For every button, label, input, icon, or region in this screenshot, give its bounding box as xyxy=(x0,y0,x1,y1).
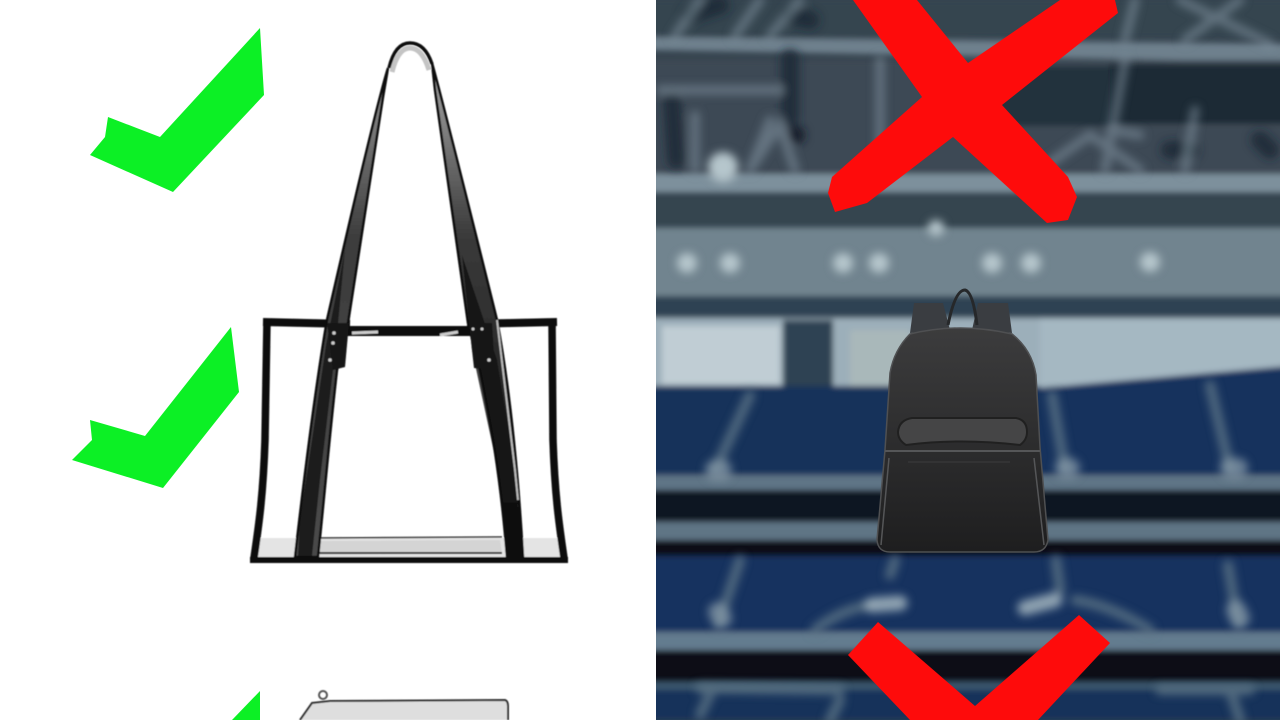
black backpack xyxy=(877,290,1048,552)
backpack handle xyxy=(948,290,977,325)
right strap xyxy=(432,63,523,557)
icon: red X top xyxy=(828,0,1118,223)
backpack straps xyxy=(910,303,1012,333)
stadium roof truss and seat frames xyxy=(660,0,1270,720)
panel: stadium background xyxy=(650,0,1280,720)
backpack zipper line xyxy=(885,450,1040,452)
panel: allowed bags on white background xyxy=(0,0,656,720)
handle arch xyxy=(389,43,432,68)
icon: green check mark top xyxy=(90,28,264,192)
bag body outline xyxy=(263,322,557,324)
left strap xyxy=(295,68,388,557)
icon: green check mark bottom xyxy=(232,691,260,720)
icon: red X bottom xyxy=(848,615,1110,720)
bag bottom pocket xyxy=(255,538,563,557)
backpack front pocket xyxy=(898,418,1027,445)
icon: green check mark middle xyxy=(72,327,239,488)
strap connector tabs xyxy=(327,323,349,370)
clear tote bag xyxy=(250,43,568,560)
backpack body xyxy=(877,328,1048,552)
clear pouch at bottom xyxy=(300,691,508,720)
